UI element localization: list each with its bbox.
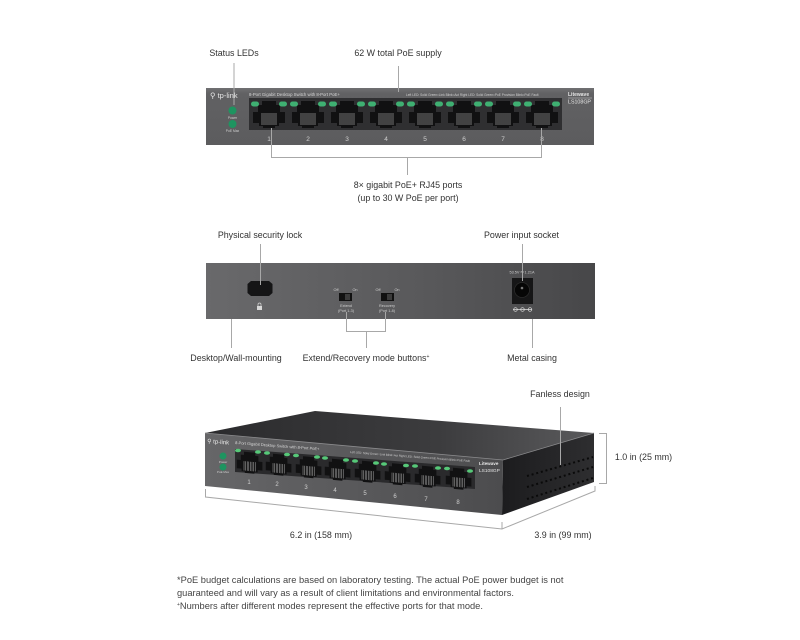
port numbers: 2 — [306, 136, 310, 143]
angled port numbers: 3 — [304, 485, 308, 491]
side face — [502, 433, 594, 515]
label: fanless design: Fanless design — [530, 389, 590, 399]
footnotes: + — [177, 602, 180, 608]
angled port numbers: 4 — [333, 488, 337, 494]
footnotes: guaranteed and will vary as a result of client limitations and environmental factors. — [177, 588, 514, 598]
status LEDs: PoE Max — [226, 129, 240, 133]
model label — [479, 461, 500, 474]
angled port LEDs — [235, 449, 473, 473]
dimension: width and depth — [206, 486, 595, 529]
dimension: height — [599, 434, 606, 484]
angled ports — [237, 451, 471, 491]
panel: angled view of switch — [205, 411, 594, 515]
bracket: mode buttons — [346, 312, 386, 348]
front face — [205, 433, 503, 515]
leader: fanless design — [560, 407, 562, 465]
extend switch: Off — [334, 288, 339, 292]
angled port numbers: 2 — [275, 482, 279, 488]
model label: LS108GP — [568, 100, 591, 106]
port numbers: 3 — [345, 136, 349, 143]
label: security lock: Physical security lock — [218, 230, 303, 240]
recovery switch: (Port 1-8) — [379, 309, 396, 313]
bracket: ports — [272, 128, 542, 175]
label: metal casing: Metal casing — [507, 353, 557, 363]
recovery switch — [376, 288, 400, 313]
power rating: 53.5V ⎓ 1.21A — [510, 270, 535, 274]
extend switch: On — [352, 288, 358, 292]
model label: Litewave — [568, 92, 589, 98]
label: ports — [354, 180, 463, 203]
angled port numbers: 1 — [247, 480, 251, 486]
label: ports: (up to 30 W PoE per port) — [357, 193, 459, 203]
panel: front view of switch — [206, 88, 594, 145]
recovery switch: On — [394, 288, 400, 292]
panel: rear view of switch — [206, 263, 595, 319]
port numbers: 4 — [384, 136, 388, 143]
leader: security lock — [260, 244, 262, 285]
label: desktop mounting: Desktop/Wall-mounting — [190, 353, 282, 363]
brand logo: ⚲ tp-link — [207, 438, 230, 447]
leader: PoE supply — [398, 66, 400, 92]
model label: Litewave — [479, 461, 499, 466]
polarity symbol — [513, 308, 532, 311]
footnotes: *PoE budget calculations are based on laboratory testing. The actual PoE power budget is not — [177, 575, 564, 585]
angled port numbers — [247, 480, 460, 506]
footnotes — [177, 575, 564, 611]
port strip — [235, 449, 475, 489]
security lock slot — [248, 281, 272, 296]
angled port numbers: 8 — [456, 500, 460, 506]
leader: desktop mounting — [230, 319, 232, 348]
extend switch — [334, 288, 358, 313]
port LEDs — [251, 102, 560, 106]
switch front body — [206, 88, 594, 145]
angled port numbers: 7 — [424, 497, 428, 503]
power socket — [512, 278, 533, 304]
extend switch: Extend — [340, 304, 352, 308]
label: depth: 3.9 in (99 mm) — [534, 530, 592, 540]
brand logo: ⚲ tp-link — [210, 91, 238, 100]
status LEDs: Power — [228, 116, 238, 120]
leader: power socket — [522, 244, 524, 281]
status LEDs — [217, 452, 230, 474]
port numbers: 7 — [501, 136, 505, 143]
angled port numbers: 6 — [393, 494, 397, 500]
product title: 8-Port Gigabit Desktop Switch with 8-Port PoE+ — [235, 440, 320, 451]
port strip — [249, 98, 562, 130]
status LEDs: PoE Max — [217, 470, 230, 474]
port numbers — [267, 136, 544, 143]
top face — [205, 411, 594, 460]
eight RJ45 ports — [253, 101, 558, 128]
model label: LS108GP — [479, 468, 500, 474]
leader: metal casing — [532, 319, 534, 348]
label: status LEDs: Status LEDs — [209, 48, 259, 58]
extend switch: (Port 1-3) — [338, 309, 355, 313]
label: width: 6.2 in (158 mm) — [290, 530, 352, 540]
label: PoE supply: 62 W total PoE supply — [354, 48, 442, 58]
label: height: 1.0 in (25 mm) — [615, 452, 672, 462]
recovery switch: Off — [376, 288, 381, 292]
LED legend: Left LED: Solid Green=Link Blink=Act Right LED: Solid Green=PoE Provision Blink=PoE Fault — [350, 450, 470, 463]
rear body — [206, 263, 595, 319]
model label — [568, 92, 592, 106]
label: ports: 8× gigabit PoE+ RJ45 ports — [354, 180, 463, 190]
status LEDs: Power — [219, 460, 227, 464]
side vents — [527, 457, 593, 499]
label: power socket: Power input socket — [484, 230, 560, 240]
leader: status LEDs — [233, 63, 235, 105]
LED legend on panel: Left LED: Solid Green=Link Blink=Act Right LED: Solid Green=PoE Provision Blink=PoE Fault — [406, 93, 539, 97]
footnotes: Numbers after different modes represent the effective ports for that mode. — [180, 601, 483, 611]
status LEDs — [226, 106, 240, 133]
port numbers: 5 — [423, 136, 427, 143]
lock icon — [257, 303, 262, 310]
top edge highlight — [205, 433, 594, 460]
angled port numbers: 5 — [363, 491, 367, 497]
label: mode buttons: + — [426, 354, 429, 360]
port numbers: 6 — [462, 136, 466, 143]
port numbers: 8 — [540, 136, 544, 143]
product title on panel: 8-Port Gigabit Desktop Switch with 8-Port PoE+ — [249, 92, 340, 97]
recovery switch: Recovery — [379, 304, 395, 308]
port numbers: 1 — [267, 136, 271, 143]
label: mode buttons: Extend/Recovery mode buttons — [303, 353, 426, 363]
